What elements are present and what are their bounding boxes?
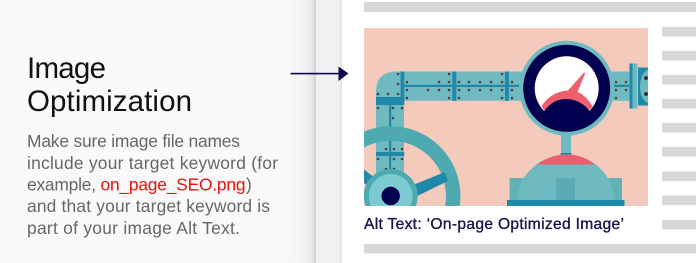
placeholder bar: bottom (364, 244, 696, 254)
gauge dial and needle (541, 72, 592, 124)
heading: Optimization (27, 85, 192, 118)
heading: Image (27, 52, 106, 85)
panel: page edge strip (316, 0, 342, 263)
text block: description (27, 131, 278, 238)
text block: description: part of your image Alt Text. (27, 218, 240, 238)
wheel valve (364, 126, 460, 206)
arrow (290, 66, 348, 81)
pipe network (376, 72, 630, 174)
panel: left description background (0, 0, 316, 263)
heading (27, 52, 192, 118)
text block: description: Make sure image file names (27, 131, 240, 151)
rivets (377, 73, 627, 170)
text block: description: and that your target keyword is (27, 196, 270, 216)
gauge (519, 41, 614, 136)
text block: description: example, (27, 174, 96, 194)
placeholder bar: top (364, 2, 696, 12)
image caption: Alt Text: ‘On-page Optimized Image’ (364, 216, 624, 233)
right flange (630, 64, 648, 108)
text block: description: on_page_SEO.png (100, 174, 246, 194)
text block: description: include your target keyword (for (27, 153, 278, 173)
illustration: pipes and gauge (364, 28, 648, 206)
placeholder bars: right column (662, 27, 696, 230)
text block: description: ) (246, 174, 252, 194)
pressure base (507, 130, 624, 206)
